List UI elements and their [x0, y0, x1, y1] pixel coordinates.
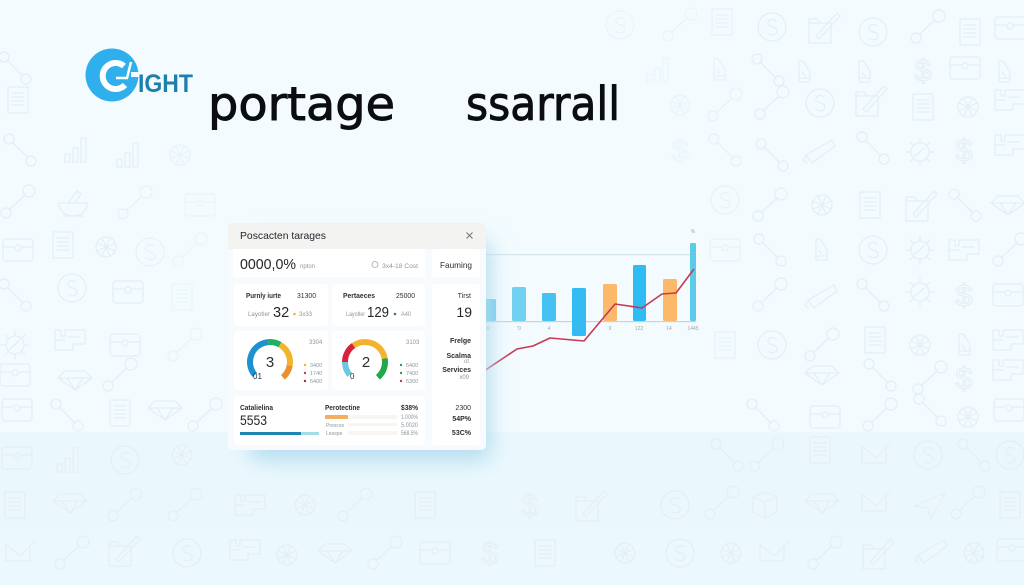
- card: metric 129: Pertaeces: [343, 293, 375, 300]
- card: bottom progress: 5553: [240, 412, 267, 428]
- card: gauge 2: 5300: [406, 379, 418, 385]
- column: right stats: x09: [459, 375, 470, 381]
- column: right stats: Tirst: [458, 293, 471, 300]
- card: bottom progress: [234, 396, 425, 445]
- card: metric 32: 31300: [297, 293, 316, 300]
- axis labels: 1445: [687, 326, 699, 332]
- card: metric 32: 3x33: [299, 312, 313, 318]
- card: gauge 2: 0: [350, 372, 355, 381]
- panel shadow: [250, 240, 490, 460]
- logo mark: [86, 48, 139, 102]
- card: gauge 3: 1740: [310, 371, 322, 377]
- axis labels: [487, 229, 699, 332]
- card: top right label: [432, 249, 480, 277]
- background lower band: [0, 432, 1024, 585]
- card: gauge 3: 3: [266, 354, 274, 371]
- axis labels: 7: [578, 326, 581, 332]
- card: metric 129: 129: [367, 305, 389, 321]
- chart gridline: [470, 254, 692, 255]
- card: top right label: Fauming: [440, 260, 472, 270]
- chart baseline: [470, 321, 696, 322]
- column: right stats: 53C%: [452, 430, 472, 437]
- card: metric 32: 32: [273, 305, 289, 321]
- card: bottom progress: 1.000%: [401, 415, 419, 421]
- chart: bars and line: [470, 229, 699, 381]
- card: metric 32: [234, 284, 328, 326]
- card: metric 32: Purnly iurte: [246, 293, 281, 300]
- card: bottom progress: $38%: [401, 405, 419, 412]
- card: headline value: npton: [300, 264, 315, 270]
- card: gauge 3: 5400: [310, 379, 322, 385]
- card: metric 129: A40: [401, 312, 412, 318]
- logo: [86, 48, 193, 102]
- card: bottom progress: 568.5%: [401, 431, 419, 437]
- card: gauge 3: 3400: [310, 363, 322, 369]
- axis labels: 9: [609, 326, 612, 332]
- axis labels: 0: [487, 326, 490, 332]
- trend line: [470, 269, 694, 381]
- panel header: [228, 223, 486, 249]
- card: bottom progress: Leaspe: [326, 431, 343, 437]
- logo wordmark: IGHT: [138, 70, 193, 98]
- title word one: portage: [208, 77, 395, 131]
- column: right stats: 19: [456, 304, 472, 320]
- card: bottom progress: Catalielina: [240, 405, 273, 412]
- card: headline value: [233, 249, 425, 277]
- title word two: ssarrall: [466, 77, 620, 131]
- card: bottom progress: Prescos: [326, 423, 345, 429]
- card: metric 129: 25000: [396, 293, 415, 300]
- title: [208, 77, 620, 131]
- card: gauge 2: [332, 331, 425, 390]
- panel header: Poscacten tarages: [240, 230, 326, 242]
- card: bottom progress: 5.0020: [401, 423, 419, 429]
- background upper: [0, 0, 1024, 432]
- card: metric 129: [332, 284, 425, 326]
- card: gauge 2: 3103: [406, 340, 420, 346]
- card: gauge 3: 3304: [309, 340, 323, 346]
- column: right stats: 54P%: [452, 416, 472, 423]
- card: headline value: 3x4-18 Cost: [382, 264, 418, 270]
- card: gauge 2: 2: [362, 354, 370, 371]
- axis labels: 4: [548, 326, 551, 332]
- column: right stats: ot: [464, 359, 469, 365]
- card: gauge 3: 01: [253, 372, 262, 381]
- column: right stats: Scalma: [446, 353, 471, 360]
- bars: [480, 243, 696, 336]
- card: gauge 3: [234, 331, 328, 390]
- axis labels: 122: [635, 326, 643, 332]
- column: right stats: Services: [442, 367, 471, 374]
- column: right stats: [432, 284, 480, 445]
- column: right stats: Frelge: [450, 338, 471, 345]
- card: metric 129: Layotler: [346, 312, 365, 318]
- card: bottom progress: Perotectine: [325, 405, 360, 412]
- axis labels: %: [691, 229, 696, 235]
- card: gauge 2: 7400: [406, 371, 418, 377]
- panel: dashboard: [228, 223, 486, 450]
- panel body: [228, 223, 486, 450]
- card: headline value: 0000,0%: [240, 256, 296, 273]
- axis labels: '0: [517, 326, 521, 332]
- axis labels: 14: [666, 326, 672, 332]
- card: gauge 2: 5400: [406, 363, 418, 369]
- card: metric 32: Layotler: [248, 312, 270, 318]
- column: right stats: 2300: [455, 405, 471, 412]
